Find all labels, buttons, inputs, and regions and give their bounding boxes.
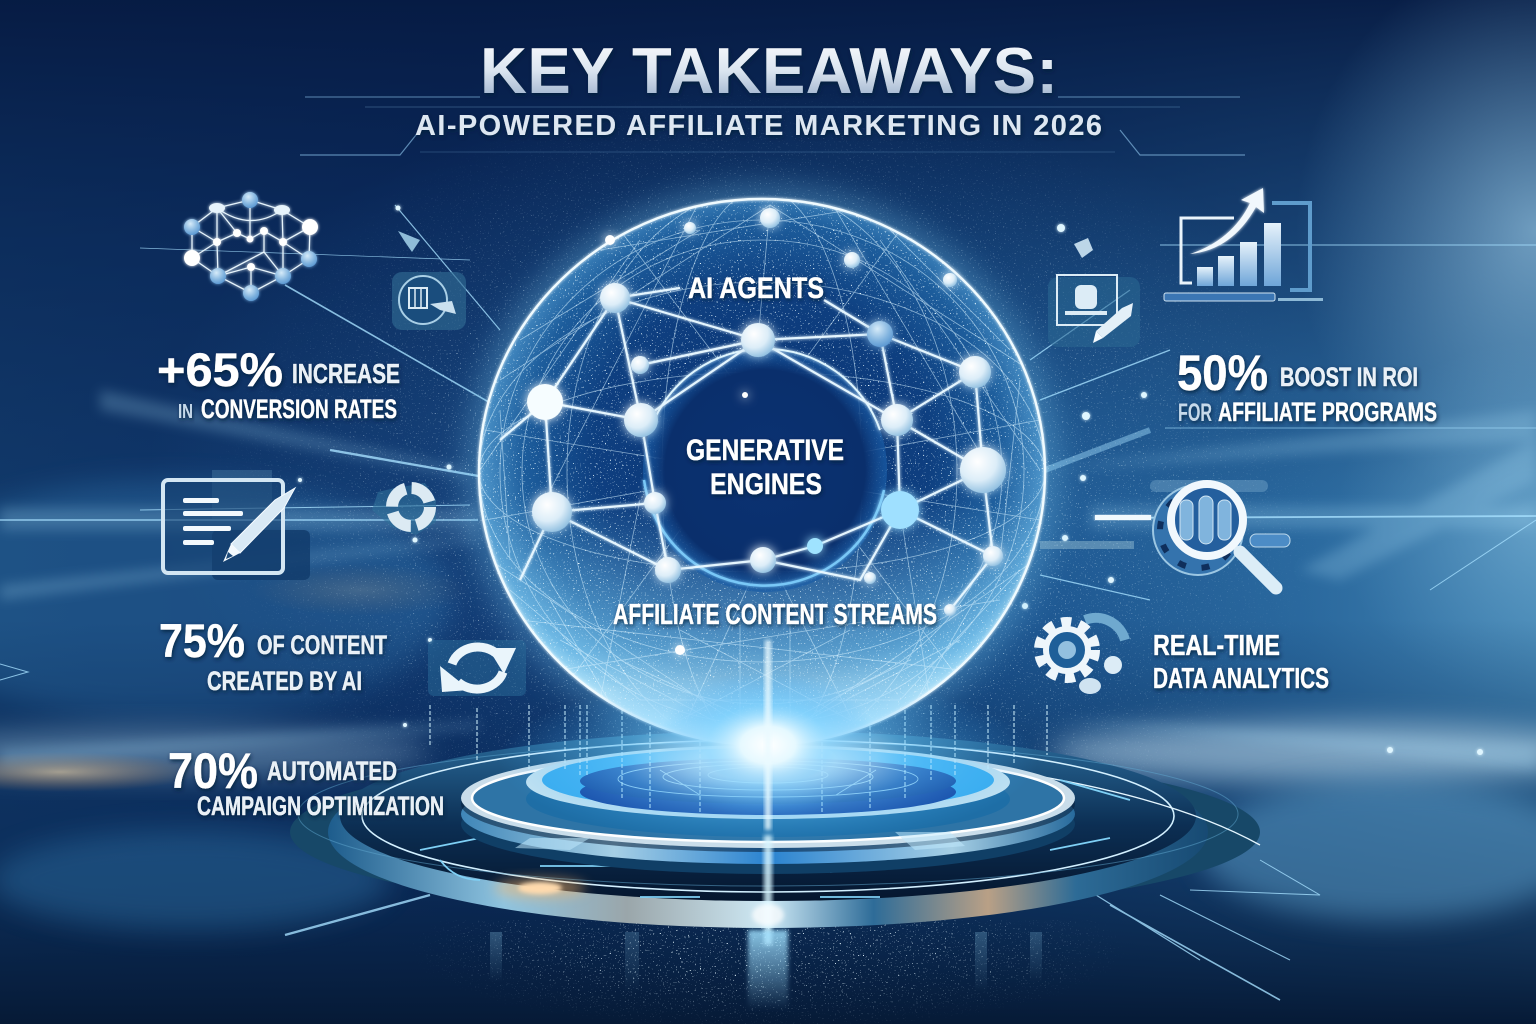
icon: gear [1039,618,1125,694]
icon: rotating segments [372,483,436,535]
title: KEY TAKEAWAYS: [480,34,1058,107]
stat: 65% increase: IN [178,401,193,423]
label: AI Agents: AI AGENTS [688,272,824,305]
stat: 50% boost [1177,345,1437,427]
stat: 70% automated: 70% [168,743,258,799]
icon: magnifier [1040,480,1290,588]
stat: 75% of content [159,614,387,696]
icon: document and pen [163,470,310,580]
icon: neural network [184,192,318,301]
stat: 65% increase [157,343,400,424]
sphere [464,184,1060,760]
stat: 50% boost: FOR [1178,399,1212,427]
stat: 50% boost: AFFILIATE PROGRAMS [1218,397,1437,427]
platform [290,680,1260,928]
label: Affiliate Content Streams: AFFILIATE CONTENT STREAMS [613,599,937,631]
outer disc [290,731,1260,928]
stat: 65% increase: INCREASE [292,358,400,389]
icon: small shard right [1074,238,1093,258]
stat: 70% automated: AUTOMATED [267,756,397,786]
subtitle: AI-POWERED AFFILIATE MARKETING IN 2026 [415,110,1102,142]
stat: 70% automated: CAMPAIGN OPTIMIZATION [197,791,444,821]
central light burst [498,640,1038,945]
stat: 50% boost: BOOST IN ROI [1280,362,1418,392]
platform reflection [490,930,1042,1010]
label: Generative Engines: GENERATIVE [686,434,844,467]
stat: real-time data analytics [1153,630,1329,695]
stat: 75% of content: OF CONTENT [257,630,387,660]
label: Generative Engines: ENGINES [710,468,822,501]
stat: 50% boost: 50% [1177,345,1268,401]
stat: 65% increase: +65% [157,343,283,396]
title divider lines [300,97,1245,155]
icon: growth chart [1164,188,1323,301]
stat: 75% of content: CREATED BY AI [207,666,362,696]
stat: 70% automated [168,743,444,821]
stat: 65% increase: CONVERSION RATES [201,394,397,424]
icon: small data dial [392,272,466,330]
label: Generative Engines [686,434,844,501]
vertical data beams [430,680,1047,812]
stat: real-time data analytics: REAL-TIME [1153,630,1280,662]
inner orb [643,348,887,592]
icon: refresh arrows [428,640,526,696]
stat: 75% of content: 75% [159,614,245,667]
rays [0,205,1536,1000]
middle ring [461,748,1075,874]
sparkles [298,206,1483,755]
stat: real-time data analytics: DATA ANALYTICS [1153,663,1329,695]
icon: small pen laptop [1048,275,1140,347]
sphere wireframe [479,189,1045,755]
inner blue disc [580,758,956,815]
icon: small arrow shard [398,231,420,252]
upper ring [526,745,1010,837]
network nodes [527,208,1006,655]
network links [500,288,993,610]
